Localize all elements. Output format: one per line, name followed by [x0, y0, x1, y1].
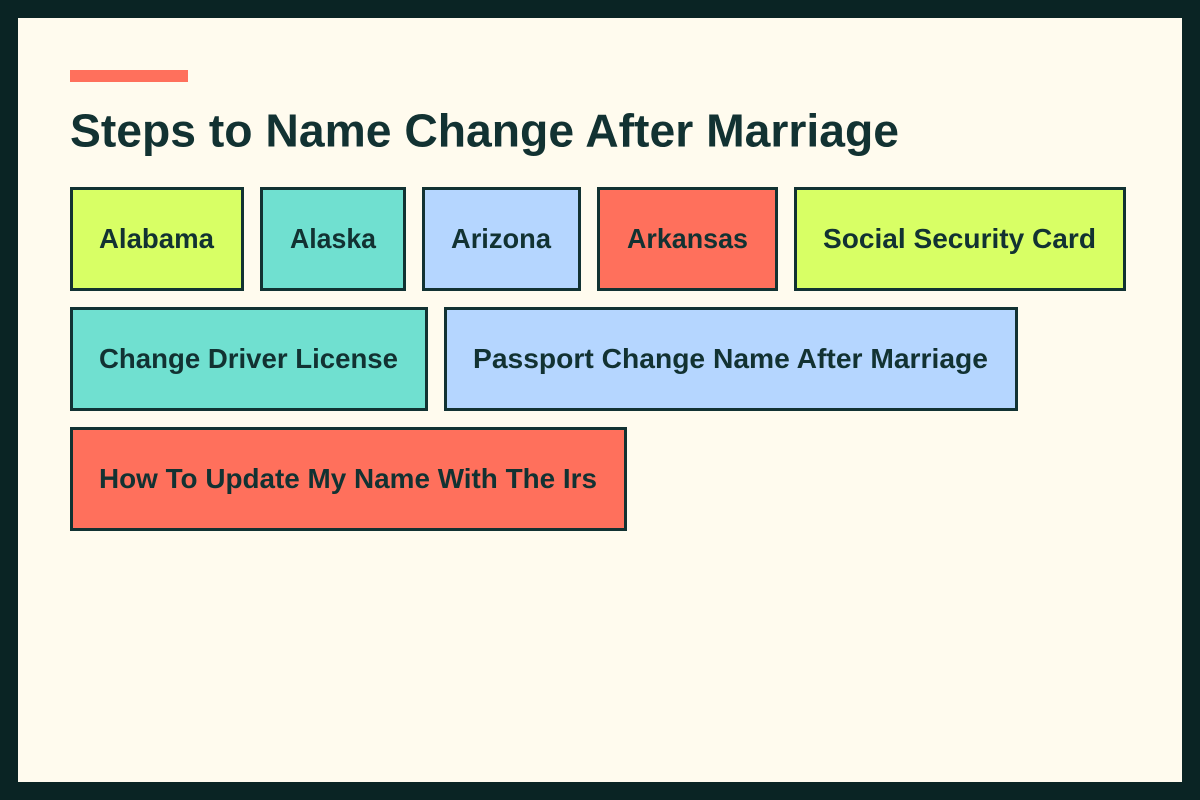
step: Alaska: [262, 188, 404, 290]
step: Social Security Card: [796, 188, 1124, 290]
step: Social Security Card: Social Security Card: [823, 223, 1096, 254]
step: Arizona: [424, 188, 580, 290]
step: Arkansas: Arkansas: [627, 223, 748, 254]
step: Alabama: [72, 188, 242, 290]
title: Steps to Name Change After Marriage: [70, 104, 899, 156]
step: How To Update My Name With The Irs: [72, 428, 626, 530]
step: Alaska: Alaska: [290, 223, 376, 254]
step: Passport Change Name After Marriage: Passport Change Name After Marriage: [473, 343, 988, 374]
step: Change Driver License: Change Driver License: [99, 343, 398, 374]
step: How To Update My Name With The Irs: How To Update My Name With The Irs: [99, 463, 597, 494]
step: Alabama: Alabama: [99, 223, 214, 254]
step: Change Driver License: [72, 308, 426, 410]
step: Arizona: Arizona: [451, 223, 551, 254]
accent bar: [70, 70, 188, 82]
step: Arkansas: [598, 188, 776, 290]
step: Passport Change Name After Marriage: [446, 308, 1016, 410]
